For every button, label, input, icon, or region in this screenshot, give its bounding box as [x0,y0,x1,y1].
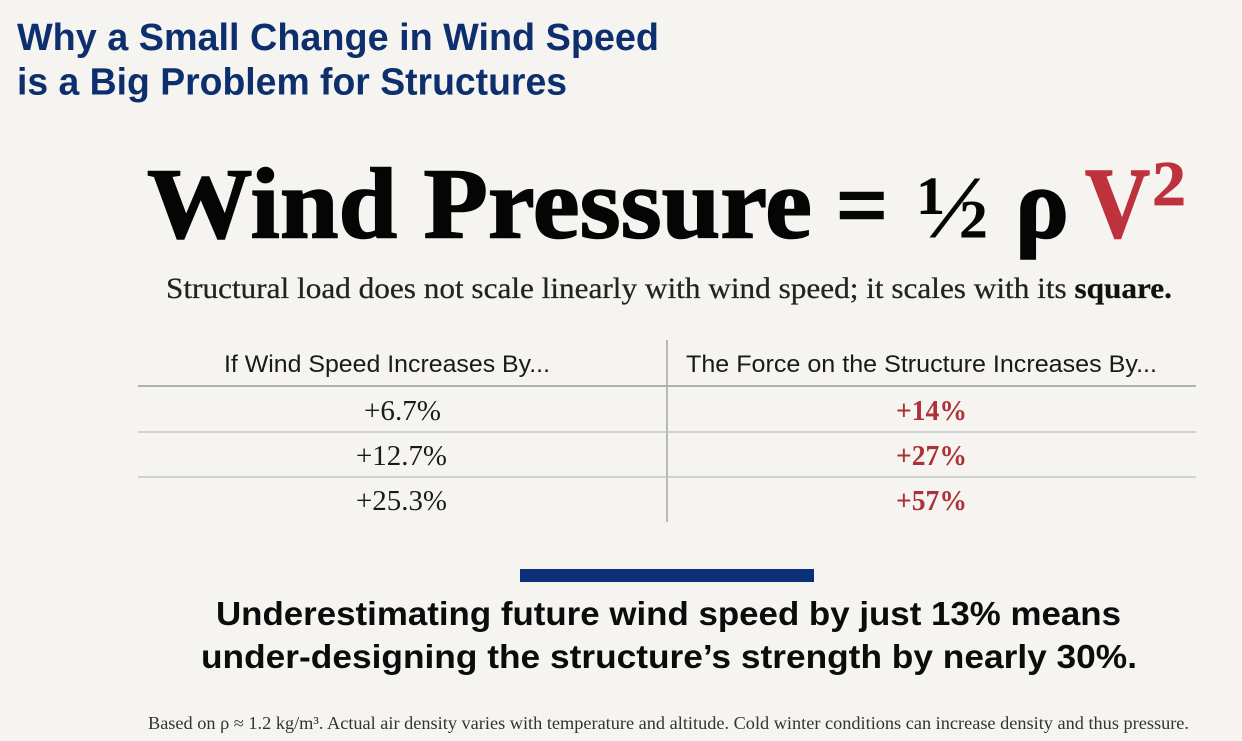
wind speed values: +25.3% [356,486,447,517]
table header: wind speed: If Wind Speed Increases By... [224,351,550,378]
formula: wind pressure equation: ρ [1015,148,1069,260]
wind speed values: +12.7% [356,441,447,472]
formula: wind pressure equation [147,147,1186,260]
comparison table [138,340,1196,522]
formula: wind pressure equation: ½ [917,158,989,258]
formula: wind pressure equation: 2 [1152,149,1186,219]
key takeaway: under-designing the structure’s strength by nearly 30%. [201,638,1137,675]
wind speed values: +6.7% [364,396,441,427]
force values [896,396,967,517]
title: Why a Small Change in Wind Speed [17,17,659,59]
accent bar [520,569,814,582]
subtitle: Structural load does not scale linearly with wind speed; it scales with its square. [166,272,1172,305]
formula: wind pressure equation: Wind Pressure [147,148,812,260]
table header: force: The Force on the Structure Increases By... [686,351,1157,378]
force values: +27% [896,441,967,472]
key takeaway [201,595,1137,675]
wind speed values [356,396,447,517]
title: is a Big Problem for Structures [17,62,567,104]
formula: wind pressure equation: = [836,152,888,258]
footnote: Based on ρ ≈ 1.2 kg/m³. Actual air density varies with temperature and altitude. Cold winter conditions can increase density and thus pressure. [148,713,1189,733]
formula: wind pressure equation: V [1085,147,1150,259]
force values: +14% [896,396,967,427]
force values: +57% [896,486,967,517]
title [17,17,659,104]
key takeaway: Underestimating future wind speed by just 13% means [216,595,1121,632]
